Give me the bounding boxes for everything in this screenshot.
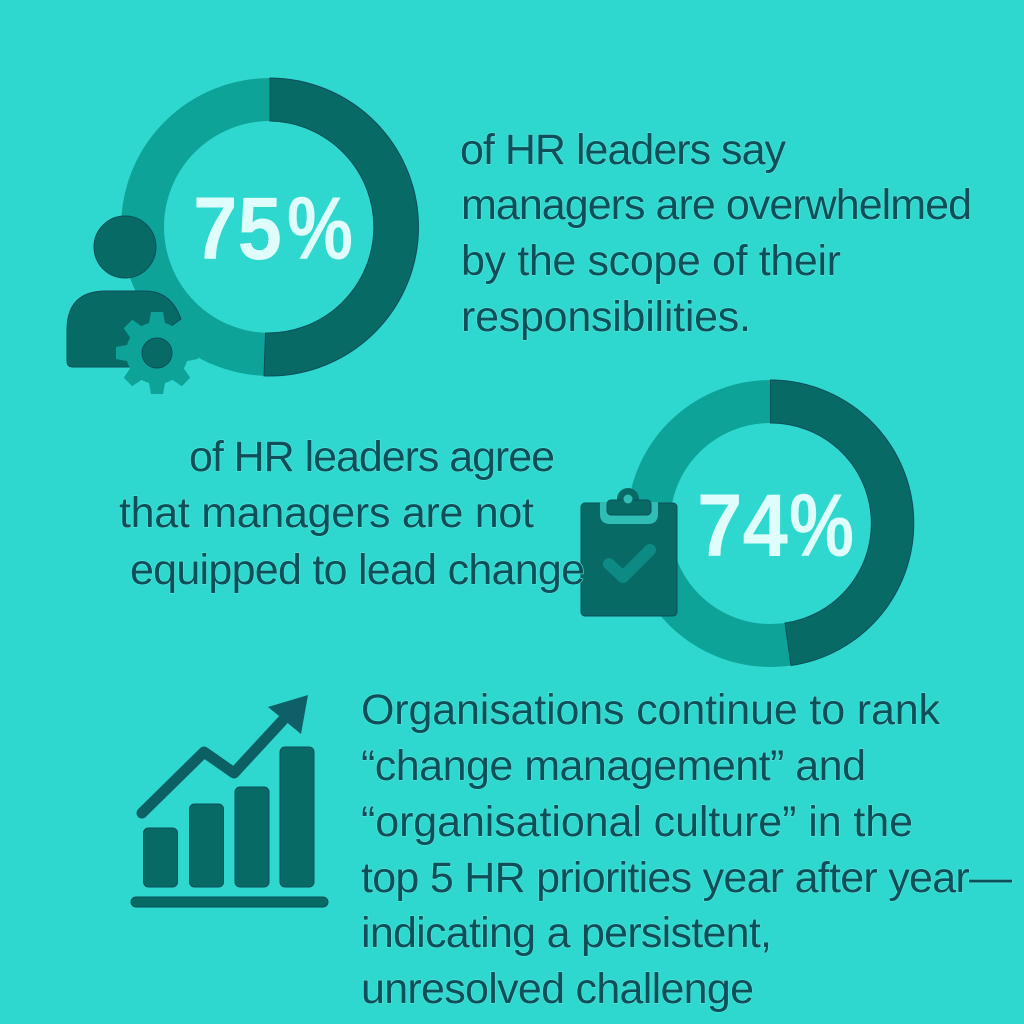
text block: 74% description: equipped to lead change xyxy=(130,546,585,594)
donut value: 75%: % xyxy=(287,178,353,278)
text block: 75% description: managers are overwhelmed xyxy=(461,181,972,229)
text block: priorities description: indicating a persistent, xyxy=(361,909,772,957)
text block: 75% description: of HR leaders say xyxy=(460,126,786,174)
text block: priorities description: unresolved challenge xyxy=(361,965,754,1013)
donut value: 75% xyxy=(193,178,353,278)
text block: priorities description: top 5 HR priorities year after year— xyxy=(361,854,1012,902)
text block: priorities description: Organisations continue to rank xyxy=(361,686,940,734)
text block: 74% description: that managers are not xyxy=(119,489,534,537)
text block: priorities description: “organisational culture” in the xyxy=(361,798,913,846)
panel: 75% statistic xyxy=(67,78,418,394)
icon: rising bar chart with arrow xyxy=(131,695,328,907)
bars xyxy=(144,747,314,887)
text block: 75% description xyxy=(460,126,972,341)
icon: clipboard with check xyxy=(581,488,677,616)
donut value: 74%: 74 xyxy=(697,475,788,575)
panel: 74% statistic xyxy=(581,380,914,666)
donut chart: 74% xyxy=(648,380,914,666)
text block: 74% description: of HR leaders agree xyxy=(189,433,555,481)
donut value: 74% xyxy=(697,475,854,575)
donut value: 74%: % xyxy=(789,475,854,575)
icon: person with gear xyxy=(67,216,198,394)
trend arrow xyxy=(142,695,308,813)
baseline xyxy=(131,897,328,907)
text block: 75% description: responsibilities. xyxy=(461,293,751,341)
donut chart: 75% xyxy=(142,78,418,376)
text block: 74% description xyxy=(119,433,585,594)
text block: 75% description: by the scope of their xyxy=(461,237,841,285)
donut value: 75%: 75 xyxy=(193,178,282,278)
text block: priorities description: “change management” and xyxy=(361,742,866,790)
text block: priorities description xyxy=(361,686,1012,1013)
